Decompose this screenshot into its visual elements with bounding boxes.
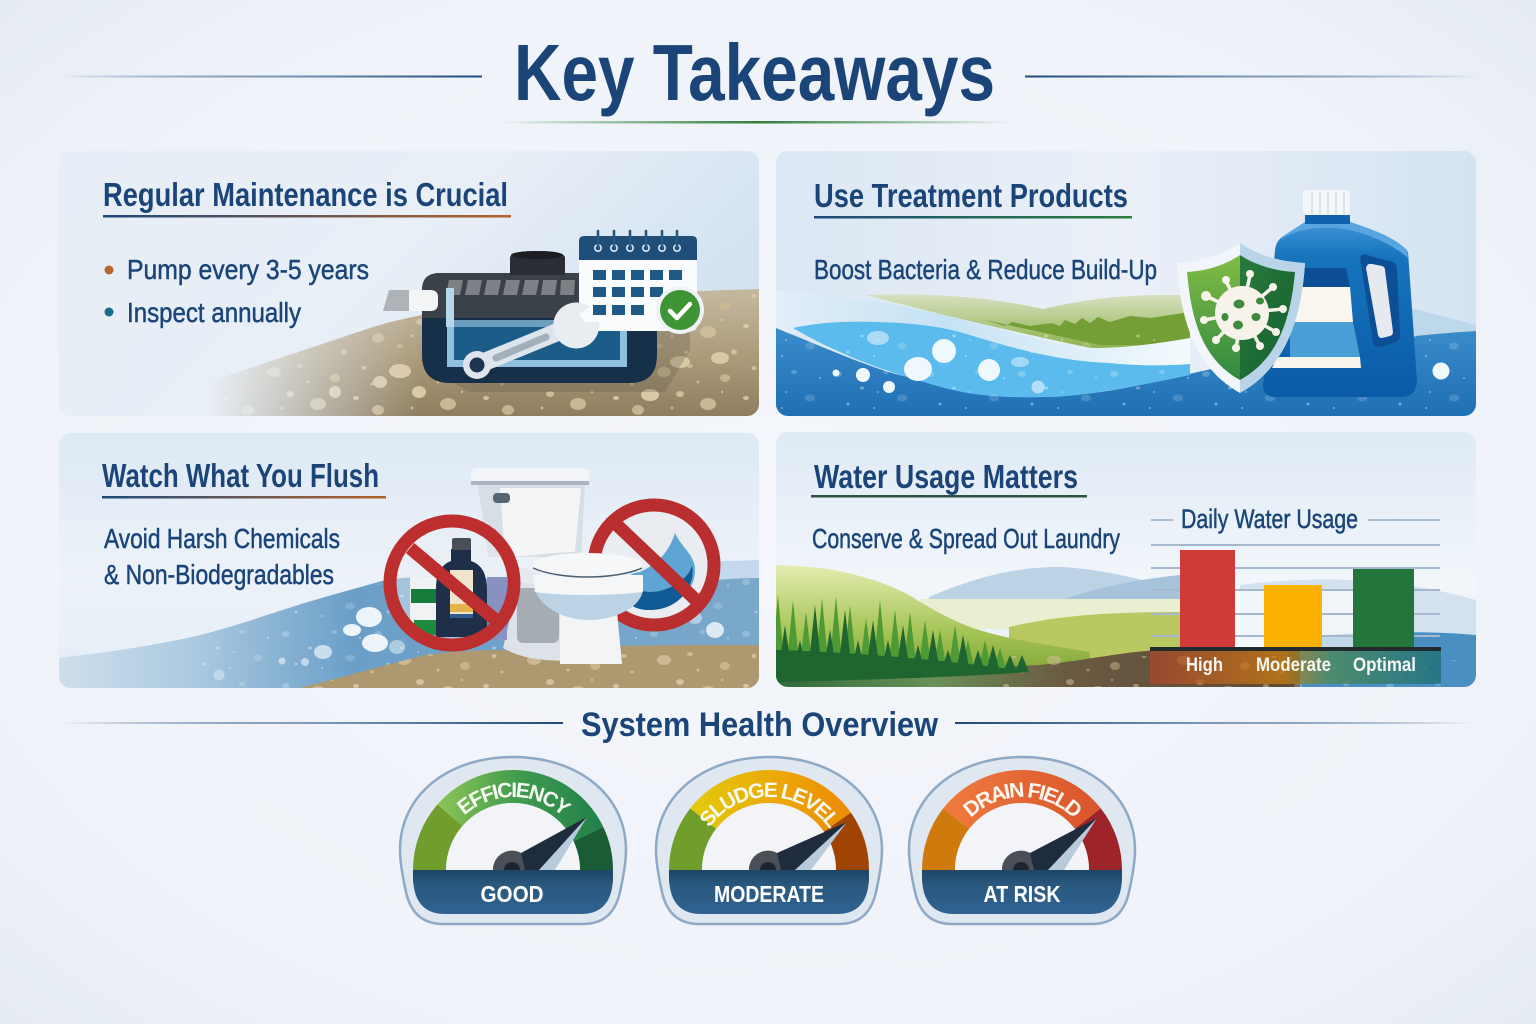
needle: [493, 817, 587, 878]
gauge: drain field: [908, 756, 1136, 926]
bar chart: daily water usage: [1150, 504, 1441, 684]
icon: bottle: [1263, 190, 1417, 397]
cup: [410, 577, 436, 635]
virus glyph: [1200, 270, 1287, 352]
panel: treatment products: [776, 151, 1476, 416]
text: boost bacteria: Boost Bacteria & Reduce Build-Up: [814, 254, 1157, 285]
icon: shield: [1177, 243, 1305, 393]
ground with stones: [190, 289, 759, 416]
bar labels: High: [1186, 655, 1223, 676]
status: GOOD: [480, 881, 544, 907]
gauge: efficiency: [398, 756, 628, 926]
heading: water usage: Water Usage Matters: [814, 458, 1078, 495]
landscape: [776, 565, 1476, 687]
gauge label: EFFICIENCY: [456, 782, 572, 815]
water: [59, 560, 759, 688]
ground: [299, 645, 759, 688]
text: avoid: [104, 523, 340, 590]
bar labels: Optimal: [1353, 655, 1416, 676]
pipe: [383, 290, 438, 311]
bar: optimal: [1353, 569, 1414, 647]
heading: flush: Watch What You Flush: [102, 457, 379, 494]
icon: wrench: [463, 302, 599, 379]
needle: [1002, 818, 1097, 878]
bullet list: Inspect annually: [127, 297, 301, 328]
chemical bottle: [436, 538, 487, 637]
title: Key Takeaways: [514, 28, 995, 117]
bullet list: Pump every 3-5 years: [127, 254, 369, 285]
gauge label: SLUDGE LEVEL: [700, 782, 836, 829]
panel: water usage: [771, 432, 1476, 687]
water waves: [776, 290, 1476, 416]
bar labels: Moderate: [1256, 655, 1331, 676]
hills: [866, 294, 1190, 350]
chart title: Daily Water Usage: [1181, 504, 1358, 534]
distant water right: [1412, 308, 1476, 336]
gauge: sludge level: [654, 756, 884, 926]
status: MODERATE: [714, 881, 824, 907]
text: avoid: Avoid Harsh Chemicals: [104, 523, 340, 554]
status: AT RISK: [984, 881, 1061, 907]
icon: toilet: [471, 468, 643, 664]
icon: septic tank: [383, 251, 690, 392]
text: avoid: & Non-Biodegradables: [104, 559, 334, 590]
icon: calendar: [579, 231, 704, 334]
bar labels: [1187, 657, 1415, 675]
grass dark blades: [776, 605, 1030, 682]
bar: moderate: [1264, 585, 1322, 647]
bar: high: [1180, 550, 1235, 647]
icon: prohibited chemicals: [390, 521, 514, 645]
heading: treatment products: Use Treatment Products: [814, 177, 1128, 214]
bullet list: [104, 254, 369, 328]
text: conserve: Conserve & Spread Out Laundry: [812, 523, 1120, 554]
panel: watch what you flush: [59, 433, 759, 688]
needle: [749, 822, 847, 878]
check badge: [656, 286, 704, 334]
icon: prohibited water drop: [594, 505, 714, 625]
heading: regular maintenance: Regular Maintenance is Crucial: [103, 176, 508, 213]
grass: [771, 595, 1007, 672]
heading: system health overview: System Health Overview: [581, 706, 938, 744]
gauge label: DRAIN FIELD: [962, 782, 1080, 817]
panel: regular maintenance: [59, 151, 759, 416]
